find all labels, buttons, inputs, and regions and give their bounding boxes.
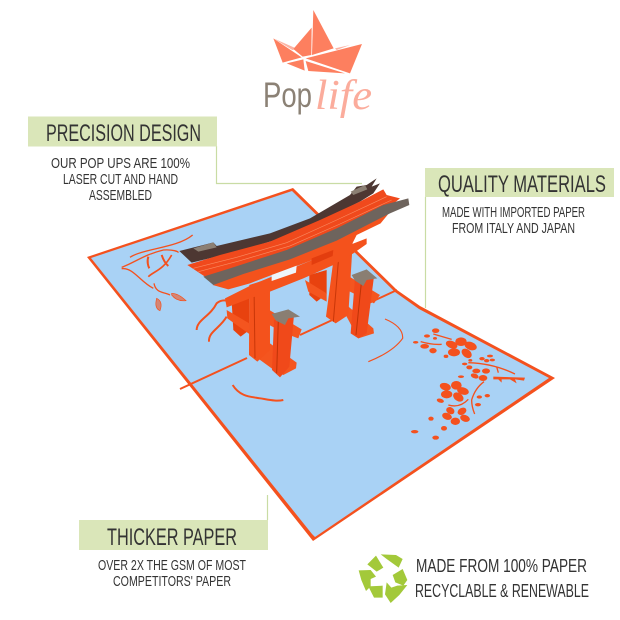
panel: pop-up card (87, 178, 555, 541)
text block: recyclable paper (415, 556, 589, 601)
logo: Poplife paper boat (263, 10, 372, 119)
cutout: cherry blossoms (368, 319, 525, 440)
pillar caps (272, 309, 300, 325)
connector lines (216, 146, 426, 520)
second lintel (225, 238, 367, 307)
card base (87, 188, 555, 541)
heading: quality materials (425, 168, 614, 198)
heading background (425, 168, 614, 197)
text block: thicker description: OVER 2X THE GSM OF MOST (98, 557, 246, 574)
text block: thicker description: COMPETITORS' PAPER (113, 573, 231, 590)
logo wordmark Pop: Pop (263, 76, 312, 115)
text block: precision description (51, 155, 190, 204)
lintel window (272, 266, 297, 281)
card blue surface (91, 191, 549, 537)
small pillars (272, 315, 294, 377)
text block: precision description: ASSEMBLED (89, 187, 152, 204)
card fold line (180, 290, 397, 389)
upper lintel (213, 214, 388, 289)
main pillars (249, 278, 270, 362)
roof dark upper (179, 178, 380, 263)
heading background (79, 520, 268, 550)
icon: recycling arrows (359, 554, 407, 603)
text block: quality description (442, 204, 585, 237)
text block: thicker description (98, 557, 246, 590)
heading text: THICKER PAPER (107, 524, 237, 551)
text block: precision description: OUR POP UPS ARE 100% (51, 155, 190, 172)
roof grey lower (203, 198, 409, 285)
lower rails (227, 310, 249, 334)
roof orange layers (187, 189, 400, 277)
text block: precision description: LASER CUT AND HAND (63, 171, 178, 188)
rear pillars (232, 295, 249, 337)
heading: precision design (28, 116, 217, 147)
heading text: PRECISION DESIGN (46, 120, 201, 147)
cutout: deer (122, 235, 283, 401)
icon: origami boat (273, 10, 362, 73)
logo wordmark life: life (315, 73, 372, 119)
heading background (28, 116, 217, 146)
heading: thicker paper (79, 520, 268, 551)
torii gate (179, 178, 409, 377)
